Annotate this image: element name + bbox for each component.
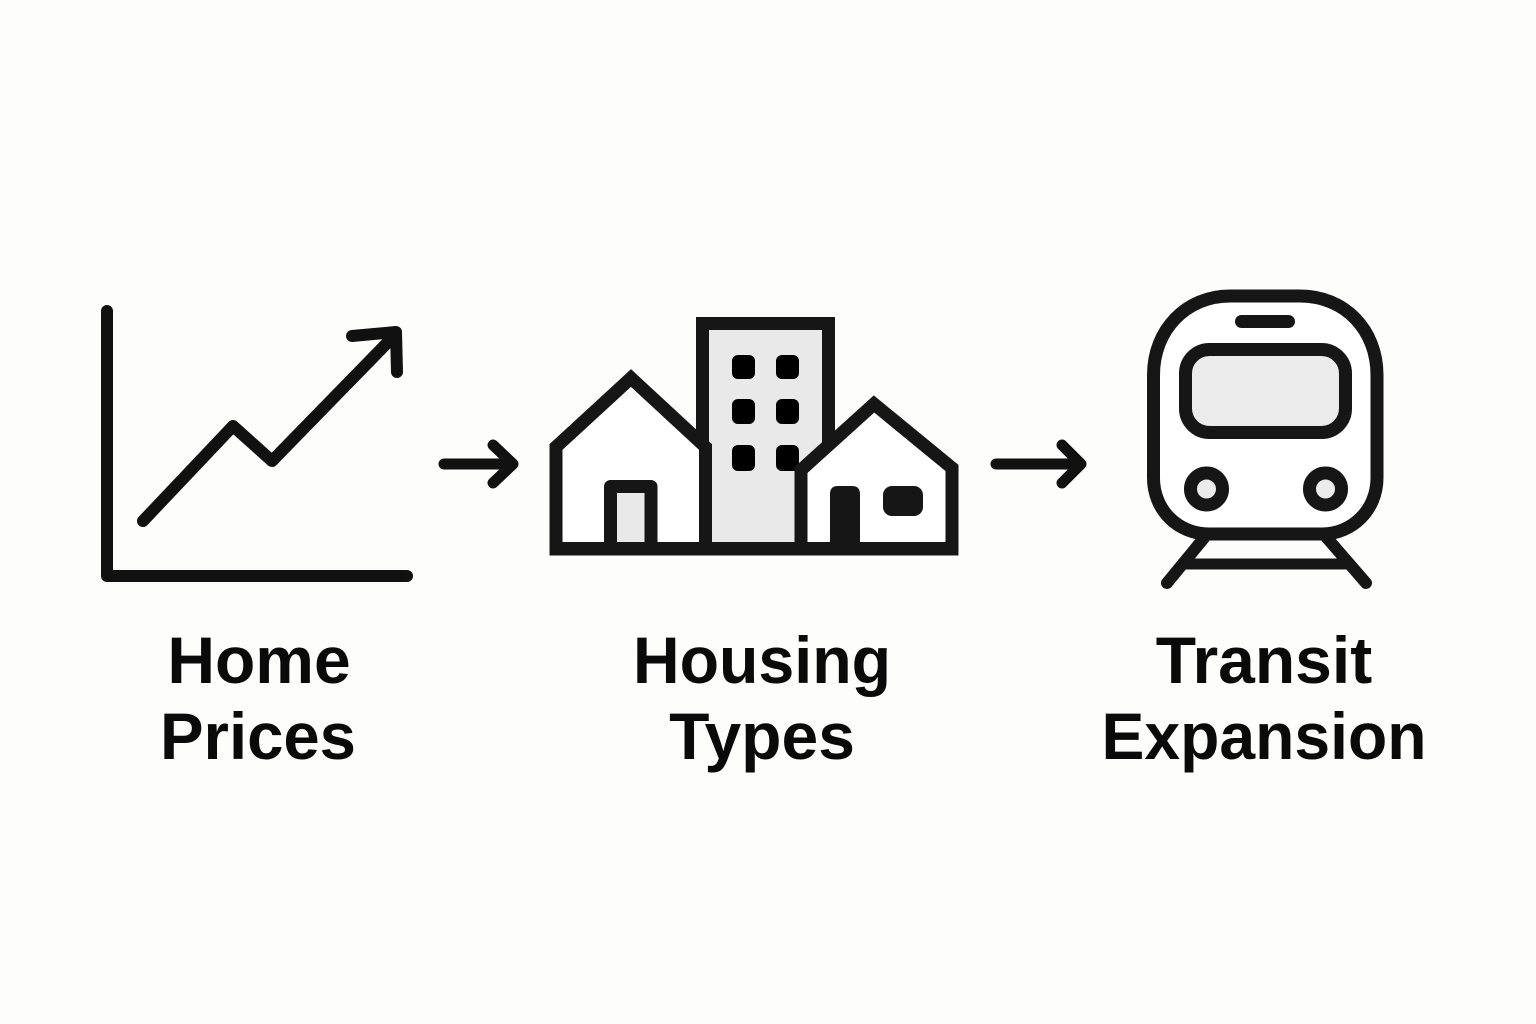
front window (1186, 350, 1346, 432)
icon: train (1154, 296, 1377, 583)
label: Home Prices: Prices (160, 699, 356, 773)
right house window (883, 486, 923, 516)
label: Home Prices: Home (167, 623, 351, 697)
label: Housing Types (633, 623, 891, 773)
tower windows (732, 355, 799, 471)
rising trend line (143, 338, 392, 521)
label: Transit Expansion: Transit (1156, 623, 1372, 697)
left house door (610, 486, 651, 549)
icon: rising price chart (107, 311, 407, 576)
ground line (550, 542, 958, 555)
arrow: housing to transit (996, 445, 1081, 483)
chart axes (107, 311, 407, 576)
arrow: prices to housing (444, 445, 513, 483)
trend arrowhead (352, 332, 397, 372)
rails (1167, 538, 1366, 583)
label: Home Prices (160, 623, 356, 773)
left headlight (1190, 473, 1222, 505)
label: Housing Types: Types (669, 699, 855, 773)
label: Transit Expansion (1102, 623, 1426, 773)
left house (556, 378, 706, 549)
label: Housing Types: Housing (633, 623, 891, 697)
icon: housing types (550, 324, 958, 555)
train body (1154, 296, 1377, 534)
right house door (830, 486, 860, 549)
headsign pill (1235, 315, 1295, 328)
apartment tower (702, 324, 828, 549)
label: Transit Expansion: Expansion (1102, 699, 1426, 773)
right house (801, 404, 952, 549)
right headlight (1310, 473, 1342, 505)
